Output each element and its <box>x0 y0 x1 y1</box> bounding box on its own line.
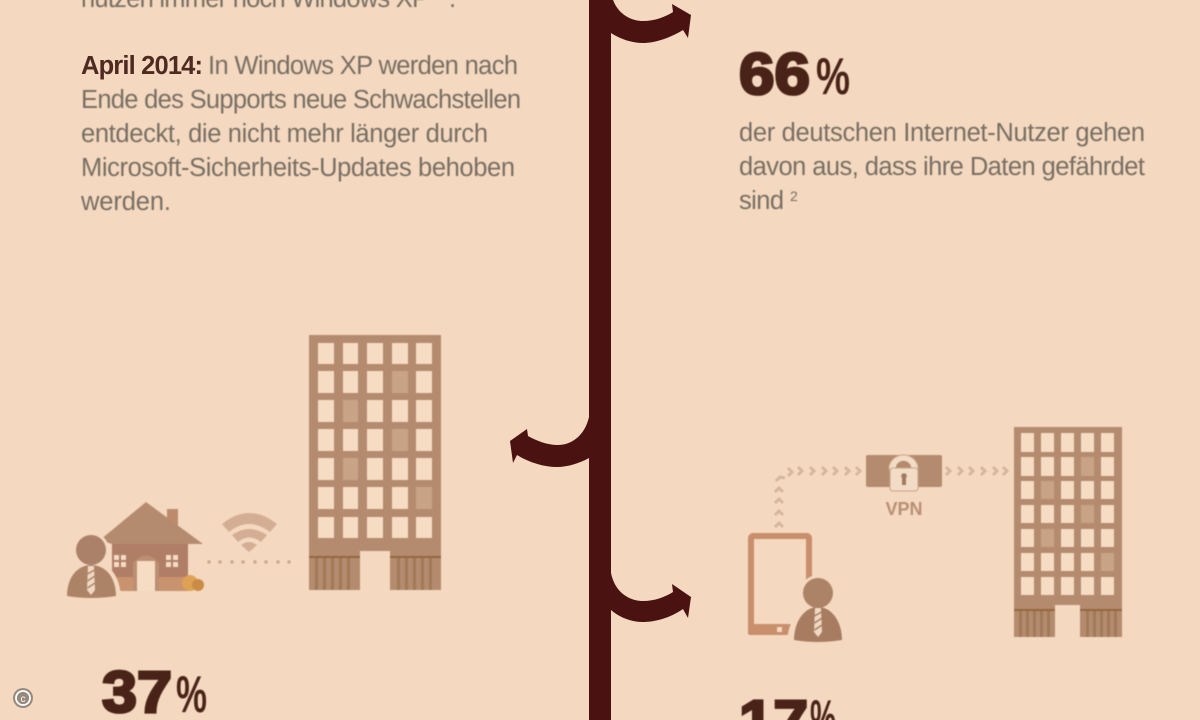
text block: April 2014: Ende des Supports neue Schwachstellen <box>81 86 521 114</box>
text block: 66 percent description: der deutschen Internet-Nutzer gehen <box>739 119 1145 147</box>
icon: person at home <box>63 532 121 600</box>
text block: April 2014: werden. <box>80 188 171 216</box>
text block: April 2014: Microsoft-Sicherheits-Updates behoben <box>81 154 515 182</box>
arrow: middle left <box>510 417 589 467</box>
chevrons to VPN <box>775 467 860 527</box>
icon: VPN lock <box>866 455 942 491</box>
chevrons to company <box>946 467 1007 475</box>
icon: wifi signal <box>222 513 277 552</box>
icon: person with tablet <box>787 575 848 644</box>
statistic: 17 percent <box>739 689 836 720</box>
illustration: home office to company via wifi <box>63 335 441 600</box>
text block: April 2014: In Windows XP werden nach <box>208 52 518 80</box>
label: VPN: VPN <box>885 499 923 519</box>
statistic: 66 percent <box>739 42 850 107</box>
timeline trunk with arrows <box>510 0 691 720</box>
vertical trunk <box>589 0 611 720</box>
illustration: mobile VPN access to company <box>748 427 1122 644</box>
text block: 66 percent description: davon aus, dass ihre Daten gefährdet <box>739 153 1145 181</box>
arrow: top right <box>611 0 691 43</box>
text block: April 2014 <box>80 52 521 216</box>
icon: office building <box>1014 427 1122 637</box>
icon: office building <box>309 335 441 590</box>
text block: 66 percent description: sind <box>739 187 784 215</box>
arrow: lower right <box>611 573 691 622</box>
statistic: 66 percent: 66 <box>739 42 810 107</box>
text block: 66 percent description: 2 <box>790 188 798 204</box>
icon: house <box>100 502 204 591</box>
text block: 66 percent description <box>739 119 1145 215</box>
connection dots <box>207 560 291 564</box>
text block: April 2014: April 2014: <box>81 52 203 80</box>
statistic: 37 percent <box>102 660 207 720</box>
text block: April 2014: entdeckt, die nicht mehr länger durch <box>81 120 488 148</box>
statistic: 66 percent: % <box>816 48 850 106</box>
icon: tablet <box>748 536 812 635</box>
icon: copyright mark <box>13 688 33 708</box>
icon: copyright mark: c <box>20 694 26 705</box>
